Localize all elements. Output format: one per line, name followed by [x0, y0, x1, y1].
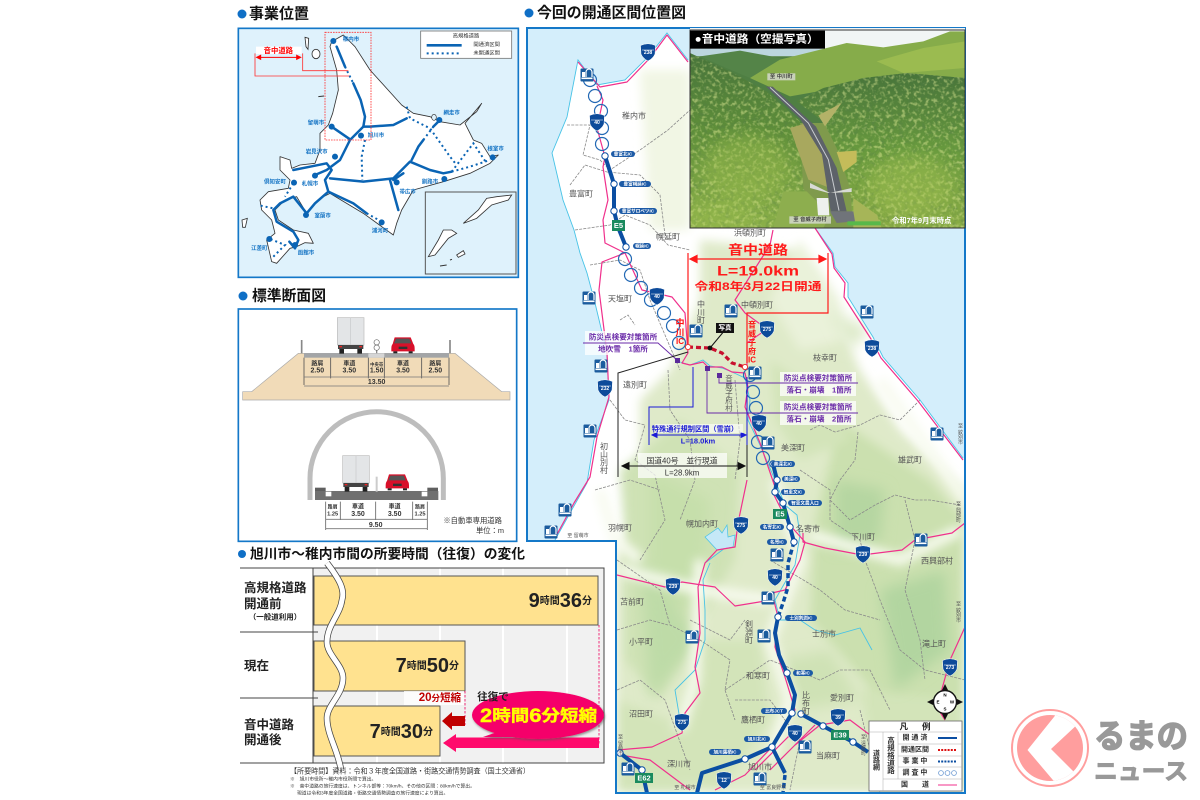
municipality names: 和寒町	[746, 670, 770, 680]
municipality names: 至 富良野市	[760, 784, 786, 791]
note: road type and unit: ※自動車専用道路	[443, 516, 503, 525]
callout: otonaka road	[688, 242, 828, 363]
expressway: open sections	[605, 156, 868, 793]
municipality names: 雄武町	[898, 454, 922, 464]
sea	[528, 29, 964, 540]
distant hills	[700, 50, 772, 56]
tunnel cross section: 路肩	[415, 503, 425, 510]
municipality names: 枝幸町	[813, 352, 837, 362]
label: otoineppu IC: IC	[748, 356, 756, 364]
interchange name tags: 比布JCT	[765, 708, 783, 714]
callout: 2 hours 6 minutes saved	[472, 690, 604, 739]
route shields: 275	[678, 720, 686, 726]
bar: current: 7時間50分	[396, 655, 459, 677]
highway in photo	[766, 87, 847, 211]
expressway number tags: E39	[833, 730, 847, 740]
callout: otonaka road: 令和8年3月22日開通	[694, 279, 822, 293]
municipality names: 幌加内町	[686, 518, 718, 528]
label: rockfall spot 1: 防災点検要対策箇所	[784, 372, 853, 382]
photo marker: 写真	[718, 322, 732, 332]
parallel existing road	[618, 352, 747, 478]
legend: route map: 道路網	[872, 749, 880, 772]
interchange name tags: 名寄IC	[770, 538, 785, 546]
embankment cross section: 車道	[397, 359, 409, 367]
category labels: （一般道利用）	[249, 612, 301, 622]
interchange name tags: 旭川鷹栖IC	[714, 748, 737, 756]
city names	[251, 35, 504, 256]
legend: expressway types: 未開通区間	[473, 48, 500, 56]
route shields: 273	[946, 665, 954, 671]
photo title bar: ●音中道路（空撮写真）	[695, 32, 819, 46]
municipality names: 中頓別町	[741, 300, 773, 310]
legend: expressway types: 開通済区間	[473, 40, 500, 48]
label: otonaka road with arrow	[255, 46, 349, 76]
legend: route map: 調 査 中	[903, 768, 927, 776]
route shields	[590, 44, 958, 789]
compass: N	[943, 692, 947, 698]
label: nakagawa IC	[675, 317, 685, 346]
label: otoineppu IC: 威	[748, 328, 756, 338]
municipality names: 中川町	[696, 299, 706, 324]
callout: 2 hours 6 minutes saved: 往復で	[477, 690, 509, 703]
embankment cross section: 3.50	[396, 367, 410, 374]
logo text: ニュース	[1094, 758, 1188, 784]
label: rockfall spot 2	[705, 366, 858, 425]
photo title bar	[690, 31, 825, 49]
legend: route map: 事 業 中	[903, 756, 927, 765]
interchange name tags: 豊富サロベツIC	[622, 208, 655, 214]
label: otoineppu IC: 府	[748, 347, 756, 356]
label: nakagawa IC: 川	[675, 328, 685, 338]
interchange name tags: 美深IC	[784, 476, 799, 482]
tunnel cross section: 車道	[352, 502, 364, 510]
municipality names: 稚内市	[622, 110, 646, 120]
route shields: 275	[763, 327, 771, 333]
photo direction label: otoineppu: 至 音威子府村	[793, 215, 827, 223]
municipality names: 滝上町	[922, 638, 946, 648]
city names: 帯広市	[399, 188, 416, 196]
source note: ※ 音中道路の旅行速度は、トンネル部等：70km/h、その他の区間：80km/hで算出。	[290, 782, 475, 790]
forest texture	[683, 51, 965, 231]
embankment cross section: 路肩	[311, 359, 323, 367]
interchange name tags: 士別剣淵IC	[790, 614, 813, 622]
embankment cross section: 中央帯	[370, 361, 384, 368]
label: snow drifting spot: 防災点検要対策箇所	[589, 332, 658, 342]
route shields: 40	[594, 120, 600, 126]
municipality names: 至 興部町	[955, 501, 961, 523]
municipality names: 美深町	[781, 442, 805, 452]
interchange name tags: 豊富幌延IC	[624, 180, 647, 188]
compass: E	[936, 700, 940, 704]
route shields: 40	[772, 575, 778, 581]
legend: route map	[869, 721, 962, 791]
photo date: 令和7年9月末時点	[892, 216, 952, 225]
city names: 旭川市	[368, 131, 385, 139]
compass: S	[943, 706, 947, 712]
route shields: 238	[868, 346, 876, 352]
compass	[927, 684, 963, 720]
heading: project location: 事業位置	[249, 4, 309, 22]
photo border	[690, 30, 965, 228]
aerial photo	[683, 28, 965, 231]
special traffic restriction section	[649, 367, 747, 446]
left forest	[690, 53, 803, 228]
category labels: 開通前	[244, 596, 282, 611]
legend: route map: 国 道	[901, 780, 929, 788]
interchange name tags: 智恵文IC	[784, 488, 803, 496]
municipality names: 比布町	[802, 690, 810, 715]
city names: 室蘭市	[314, 212, 331, 220]
city names: 留萌市	[308, 118, 325, 126]
label: 20 min saved: 20分短縮	[419, 691, 461, 704]
municipality names: 旭川市	[748, 762, 772, 772]
roadside station icons	[544, 68, 944, 786]
map panel border	[527, 28, 965, 793]
embankment cross section	[243, 318, 510, 400]
valley slopes	[790, 124, 827, 187]
tunnel cross section: 1.25	[414, 511, 426, 517]
municipality names: 羽幌町	[608, 522, 632, 532]
expressway network: open sections	[273, 47, 452, 248]
expressway number tags: E5	[775, 510, 785, 518]
municipality names: 至 紋別市	[955, 601, 961, 624]
rivers	[552, 33, 963, 720]
logo text: るまの	[1094, 718, 1188, 754]
label: nakagawa IC: 中	[675, 317, 685, 328]
arrow: 2 hours 6 min	[443, 734, 599, 752]
bar: after otonaka road opens	[314, 706, 440, 756]
expressway number tags: E5	[614, 221, 623, 230]
frame	[240, 568, 604, 763]
tunnel cross section: 9.50	[369, 522, 383, 529]
city names: 浦河町	[372, 227, 389, 235]
dashed guide lines	[465, 625, 599, 745]
interchange name tags: 幌延IC	[635, 242, 650, 250]
special traffic restriction section: 特殊通行規制区間（雪崩）	[652, 424, 738, 434]
municipality names: 士別市	[812, 628, 836, 638]
route shields: 40	[654, 294, 660, 300]
route shields: 232	[601, 386, 609, 392]
municipality names: 愛別町	[830, 692, 854, 702]
municipality names: 下川町	[851, 532, 875, 542]
tunnel cross section: 3.50	[351, 511, 365, 518]
bar: after otonaka road opens: 7時間30分	[370, 721, 433, 743]
municipality names: 初山別村	[600, 441, 608, 474]
callout: otonaka road: L=19.0km	[717, 264, 799, 278]
tunnel cross section: 3.50	[388, 511, 402, 518]
city names: 倶知安町	[264, 177, 286, 185]
municipality names: 天塩町	[608, 294, 632, 304]
valley backdrop	[697, 56, 854, 228]
heading: standard cross section: 標準断面図	[252, 286, 326, 304]
interchange name tags	[611, 150, 822, 756]
municipality names: 小平町	[629, 638, 653, 646]
route shields: 12	[721, 778, 727, 784]
source note: 現道は令和3年度全国道路・街路交通情勢調査の旅行速度により算出。	[297, 790, 448, 796]
panel: route map	[527, 28, 966, 793]
parallel existing road: 国道40号 並行現道	[646, 456, 718, 466]
city markers	[266, 38, 496, 248]
municipality names	[567, 110, 963, 791]
terrain shading	[600, 70, 965, 793]
embankment cross section: 路肩	[429, 359, 441, 367]
parallel existing road: L=28.9km	[665, 468, 699, 478]
city names: 函館市	[298, 248, 315, 256]
source note: ※ 旭川市役所～稚内市役所間で算出。	[290, 776, 376, 782]
legend: expressway types: 高規格道路	[453, 31, 480, 39]
municipal boundaries	[567, 110, 965, 793]
arrow: 20 min	[442, 712, 465, 730]
city names: 岩見沢市	[306, 148, 328, 156]
source note	[290, 766, 530, 796]
embankment cross section: 13.50	[368, 379, 386, 386]
embankment cross section: 1.50	[370, 367, 384, 374]
legend: route map: 高規格道路	[886, 735, 896, 775]
municipality names: 至 留萌市	[567, 532, 589, 539]
municipality names: 遠別町	[623, 380, 647, 390]
route shields: 39	[835, 715, 841, 721]
interchange name tags: 豊富北IC	[614, 150, 633, 158]
route shields: 40	[756, 421, 762, 427]
tunnel cross section	[310, 412, 443, 530]
tunnel cross section: 車道	[389, 502, 401, 510]
embankment cross section: 車道	[343, 359, 355, 367]
logo text	[1094, 718, 1188, 784]
compass: W	[950, 700, 955, 704]
bar: current	[314, 641, 465, 691]
city names: 稚内市	[343, 35, 360, 43]
city names: 網走市	[443, 108, 460, 116]
interchange name tags: 美深北IC	[774, 460, 793, 468]
expressway network: unopened sections	[261, 67, 490, 257]
label: nakagawa IC: IC	[676, 337, 684, 346]
label: rockfall spot 2: 防災点検要対策箇所	[784, 402, 853, 412]
expressway number tags	[612, 220, 849, 783]
municipality names: 当麻町	[816, 750, 840, 760]
interchange markers	[602, 153, 856, 773]
interchange name tags: 和寒IC	[796, 670, 811, 676]
lake	[705, 525, 735, 550]
interchange name tags: 名寄北IC	[763, 524, 782, 530]
label: rockfall spot 2: 落石・崩壊 2箇所	[787, 414, 852, 424]
photo marker	[708, 322, 734, 350]
city names: 根室市	[487, 144, 504, 152]
category labels: 現在	[244, 658, 269, 673]
interchange name tags: 智恵文農入口	[791, 500, 819, 506]
legend: route map: 開 通 済	[903, 732, 927, 742]
category labels	[244, 580, 307, 747]
municipality names: 鷹栖町	[741, 714, 765, 724]
interchange name tags: 旭川北IC	[748, 736, 767, 742]
label: 20 min saved	[404, 691, 464, 705]
photo direction label: nakagawa	[767, 72, 795, 80]
national roads	[555, 35, 965, 790]
watermark logo	[1012, 710, 1188, 786]
inset: northern territories	[425, 192, 516, 274]
embankment cross section: 3.50	[343, 367, 356, 374]
grid	[377, 568, 567, 763]
municipality names: 音威子府村	[724, 374, 734, 412]
chart: round-trip travel time	[240, 563, 604, 796]
label: otoineppu IC	[748, 320, 756, 364]
city names: 江差町	[251, 244, 268, 252]
opened section: red dashed line	[685, 344, 748, 370]
right forest	[814, 73, 964, 228]
tunnel cross section: 路肩	[328, 503, 338, 510]
municipality names: 名寄市	[796, 524, 820, 534]
red location box	[325, 32, 371, 140]
label: snow drifting spot: 地吹雪 1箇所	[598, 344, 648, 354]
route shields: 239	[859, 552, 867, 558]
municipality names: 苫前町	[620, 596, 644, 606]
category labels: 開通後	[244, 732, 282, 747]
city names: 釧路市	[422, 177, 439, 185]
municipality names: 幌延町	[656, 232, 680, 242]
embankment cross section: 2.50	[429, 367, 442, 374]
expressway number tags: E62	[637, 774, 651, 782]
municipality names: 西興部村	[921, 556, 953, 566]
label: rockfall spot 1: 落石・崩壊 1箇所	[787, 384, 852, 394]
municipality names: 豊富町	[569, 188, 593, 198]
special traffic restriction section: L=18.0km	[681, 436, 716, 446]
municipality names: 至 札幌市	[674, 784, 696, 791]
expressway: under construction	[778, 542, 794, 793]
municipality names: 至 紋別市	[957, 423, 963, 446]
label: otoineppu IC: 音	[748, 320, 756, 330]
label: rockfall spot 1	[717, 372, 858, 396]
panel: standard cross section	[238, 309, 517, 541]
land	[540, 33, 966, 793]
route shields: 238	[644, 50, 652, 56]
municipality names: 浜頓別町	[734, 228, 766, 238]
municipality names: 剣淵町	[744, 620, 754, 644]
bar: before expressway	[314, 576, 598, 625]
municipality names: 至 遠軽町	[860, 734, 866, 756]
label: otonaka road with arrow: 音中道路	[264, 46, 294, 55]
municipality names: 深川市	[667, 758, 691, 768]
embankment cross section: 2.50	[311, 367, 324, 374]
legend: route map: 凡例	[900, 722, 930, 732]
axis break	[327, 563, 343, 770]
legend: expressway types	[421, 31, 512, 58]
photo direction label: otoineppu	[789, 215, 831, 224]
survey sections: open circles	[584, 74, 770, 464]
hokkaido landmass	[242, 35, 498, 263]
heading: travel time change: 旭川市～稚内市間の所要時間（往復）の変化	[250, 546, 526, 562]
municipality names: 至 留萌市	[617, 734, 623, 757]
legend: route map: 開通区間	[901, 744, 929, 754]
note: road type and unit	[443, 516, 504, 535]
city names: 札幌市	[302, 179, 319, 187]
note: road type and unit: 単位：m	[476, 526, 504, 535]
source note: 【所要時間】資料：令和３年度全国道路・街路交通情勢調査（国土交通省）	[290, 766, 530, 776]
label: snow drifting spot	[583, 331, 680, 363]
municipality names: 沼田町	[629, 710, 653, 718]
tunnel cross section: 1.25	[327, 511, 338, 517]
bar: before expressway: 9時間36分	[529, 590, 592, 612]
plot area	[313, 568, 604, 763]
panel: project location map	[238, 28, 518, 277]
logo mark	[1012, 710, 1088, 786]
label: otoineppu IC: 子	[748, 338, 756, 348]
callout: otonaka road: 音中道路	[728, 242, 788, 258]
category labels: 音中道路	[244, 717, 295, 732]
category labels: 高規格道路	[244, 580, 307, 595]
heading: map of opened section: 今回の開通区間位置図	[537, 4, 686, 22]
photo direction label: nakagawa: 至 中川町	[770, 72, 793, 80]
route shields: 239	[669, 584, 677, 590]
route shields: 275	[737, 523, 745, 529]
callout: 2 hours 6 minutes saved: 2時間 6分短縮	[480, 706, 597, 726]
route shields: 40	[792, 731, 798, 737]
